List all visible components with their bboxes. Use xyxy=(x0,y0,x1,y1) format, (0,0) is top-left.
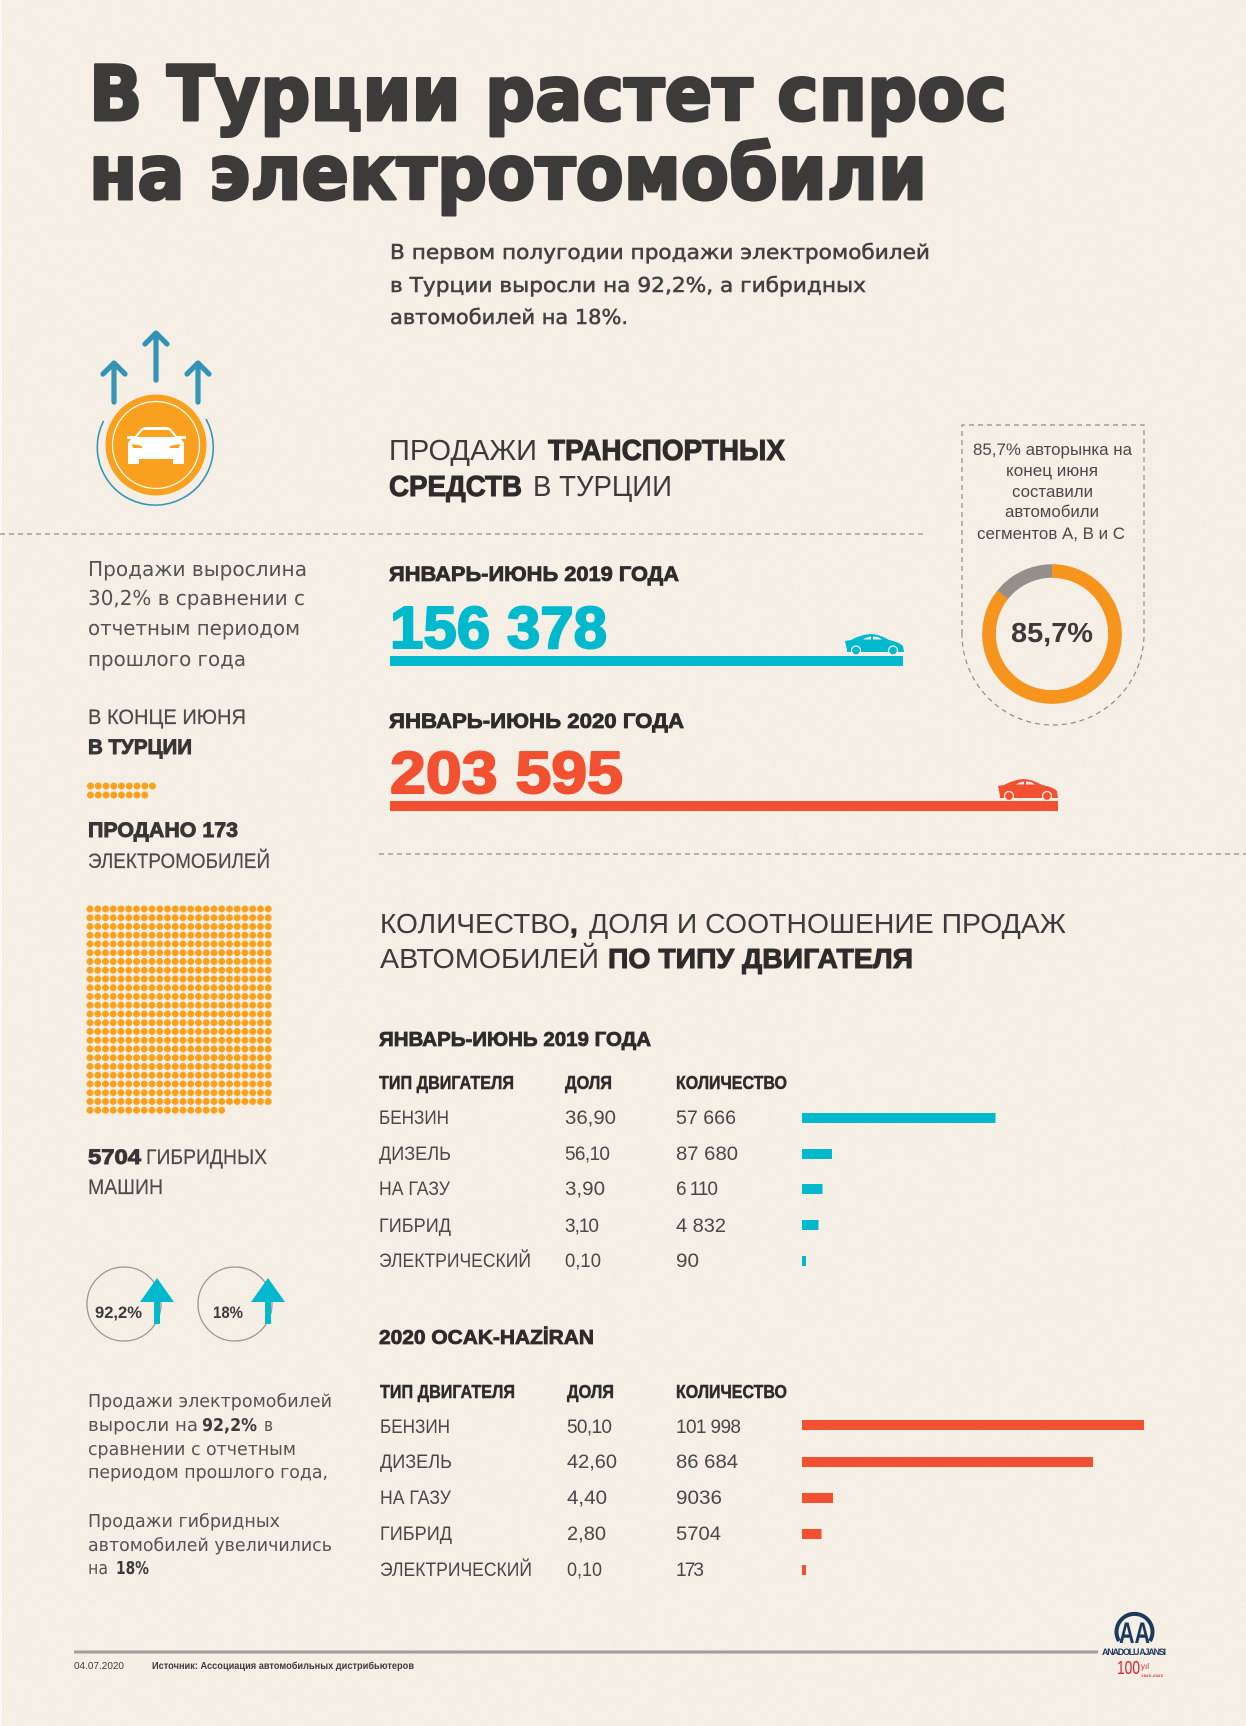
footer xyxy=(74,1650,1098,1672)
text: growth explanation: сравнении с отчетным xyxy=(88,1439,296,1460)
heading: vehicle sales: ПРОДАЖИ xyxy=(389,435,537,467)
text: sales growth: Продажи вырослина xyxy=(88,557,307,581)
text: growth explanation: Продажи гибридных xyxy=(88,1511,280,1532)
text: sales growth: прошлого года xyxy=(88,647,246,671)
footer: 04.07.2020 xyxy=(74,1661,124,1672)
callout text xyxy=(973,440,1133,543)
table header: ТИП ДВИГАТЕЛЯ xyxy=(380,1382,515,1402)
text: growth explanation: Продажи электромобилей xyxy=(88,1391,332,1412)
table rows: ДИЗЕЛЬ xyxy=(380,1452,452,1473)
table rows: 2,80 xyxy=(567,1524,606,1545)
text: growth explanation: на xyxy=(88,1558,108,1579)
title: на электротомобили xyxy=(89,128,927,217)
logo: Anadolu Ajansi: 1920-2020 xyxy=(1141,1673,1164,1678)
table rows: ДИЗЕЛЬ xyxy=(379,1144,451,1165)
icon: 18% growth xyxy=(198,1267,285,1341)
heading: by engine type: АВТОМОБИЛЕЙ xyxy=(380,943,599,974)
heading: by engine type: КОЛИЧЕСТВО xyxy=(380,908,570,939)
table rows: 4,40 xyxy=(567,1488,607,1509)
text: 173 electric cars sold: ПРОДАНО 173 xyxy=(88,819,238,842)
table rows: НА ГАЗУ xyxy=(379,1179,451,1200)
logo: Anadolu Ajansi xyxy=(1102,1614,1166,1678)
table rows xyxy=(380,1417,741,1581)
text: sales growth: отчетным периодом xyxy=(88,616,300,640)
text: at end of June in Turkey: В ТУРЦИИ xyxy=(88,736,192,759)
panel: table 2020: 2020 OCAK-HAZİRAN xyxy=(379,1326,594,1349)
panel: market share callout xyxy=(962,425,1144,725)
heading: by engine type: , xyxy=(570,908,578,939)
table rows: 6 110 xyxy=(676,1179,718,1200)
text: 173 electric cars sold: ЭЛЕКТРОМОБИЛЕЙ xyxy=(88,849,270,873)
table rows: 86 684 xyxy=(676,1452,738,1473)
icon: 92,2% growth xyxy=(87,1267,174,1341)
table rows: 3,10 xyxy=(565,1216,599,1237)
panel: table 2019 xyxy=(379,1029,996,1272)
table header: ТИП ДВИГАТЕЛЯ xyxy=(379,1073,514,1093)
logo: Anadolu Ajansi: 100 xyxy=(1117,1658,1140,1678)
text: 5704 hybrid cars: ГИБРИДНЫХ xyxy=(146,1146,267,1169)
table header: КОЛИЧЕСТВО xyxy=(676,1382,787,1402)
icon: 18% growth: 18% xyxy=(213,1303,243,1322)
table rows: ЭЛЕКТРИЧЕСКИЙ xyxy=(379,1250,531,1272)
table rows: БЕНЗИН xyxy=(379,1108,449,1129)
table rows xyxy=(379,1108,738,1272)
table rows: 173 xyxy=(676,1560,704,1581)
panel: sales 2019 xyxy=(389,563,904,666)
table rows: 0,10 xyxy=(567,1560,602,1581)
table rows: 90 xyxy=(676,1251,699,1272)
table rows: БЕНЗИН xyxy=(380,1417,450,1438)
text: growth explanation: 18% xyxy=(116,1558,149,1579)
icon: car with rising arrows xyxy=(97,333,213,505)
table rows: 50,10 xyxy=(567,1417,612,1438)
dot chart: 5704 hybrid cars xyxy=(86,905,272,1115)
donut chart 85,7%: 85,7% xyxy=(1011,617,1093,648)
heading: by engine type: ДОЛЯ И СООТНОШЕНИЕ ПРОДАЖ xyxy=(589,908,1066,939)
panel: table 2020 xyxy=(379,1326,1144,1581)
intro text: в Турции выросли на 92,2%, а гибридных xyxy=(390,273,866,297)
title: В Турции растет спрос xyxy=(89,49,1007,138)
callout text: конец июня xyxy=(1006,461,1098,480)
text: growth explanation: автомобилей увеличились xyxy=(88,1535,332,1556)
text: growth explanation xyxy=(88,1391,332,1579)
text: 5704 hybrid cars: 5704 xyxy=(88,1146,141,1169)
callout text: сегментов А, В и С xyxy=(977,524,1125,543)
table header: КОЛИЧЕСТВО xyxy=(676,1073,787,1093)
intro text xyxy=(390,240,930,329)
panel: sales 2020: 203 595 xyxy=(390,740,623,806)
panel: sales 2019: 156 378 xyxy=(390,595,607,661)
logo: Anadolu Ajansi: ANADOLU AJANSI xyxy=(1102,1647,1166,1657)
text: growth explanation: периодом прошлого года, xyxy=(88,1462,328,1483)
text: growth explanation: в xyxy=(264,1415,273,1436)
text: sales growth xyxy=(88,557,307,671)
intro text: В первом полугодии продажи электромобилей xyxy=(390,240,930,264)
icon: 92,2% growth: 92,2% xyxy=(95,1303,142,1322)
panel: sales 2019: ЯНВАРЬ-ИЮНЬ 2019 ГОДА xyxy=(389,563,679,586)
table rows: 56,10 xyxy=(565,1144,610,1165)
callout text: составили xyxy=(1012,482,1093,501)
intro text: автомобилей на 18%. xyxy=(390,305,628,329)
donut chart 85,7% xyxy=(989,571,1115,697)
heading: vehicle sales: В ТУРЦИИ xyxy=(533,471,672,503)
text: growth explanation: 92,2% xyxy=(202,1415,257,1436)
logo: Anadolu Ajansi: yıl xyxy=(1141,1662,1149,1671)
table header xyxy=(379,1073,787,1093)
panel: sales 2020 xyxy=(389,710,1058,811)
bar chart 2019 xyxy=(802,1113,996,1266)
heading: vehicle sales: ТРАНСПОРТНЫХ xyxy=(548,435,786,467)
heading: by engine type: ПО ТИПУ ДВИГАТЕЛЯ xyxy=(608,943,913,974)
footer: Источник: Ассоциация автомобильных дистрибьютеров xyxy=(152,1660,414,1672)
icon: red car xyxy=(998,779,1058,800)
table rows: ЭЛЕКТРИЧЕСКИЙ xyxy=(380,1559,532,1581)
table rows: 9036 xyxy=(676,1488,722,1509)
panel: sales 2020: ЯНВАРЬ-ИЮНЬ 2020 ГОДА xyxy=(389,710,684,733)
text: at end of June in Turkey: В КОНЦЕ ИЮНЯ xyxy=(88,706,246,729)
table rows: ГИБРИД xyxy=(380,1524,452,1545)
table rows: 36,90 xyxy=(565,1108,616,1129)
icon: teal car xyxy=(845,634,904,655)
text: growth explanation: выросли на xyxy=(88,1415,198,1436)
table rows: 87 680 xyxy=(676,1144,738,1165)
text: 5704 hybrid cars xyxy=(88,1146,267,1199)
text: 5704 hybrid cars: МАШИН xyxy=(88,1176,163,1199)
heading: vehicle sales: СРЕДСТВ xyxy=(389,471,522,503)
bar chart 2020 xyxy=(802,1420,1144,1575)
panel: table 2019: ЯНВАРЬ-ИЮНЬ 2019 ГОДА xyxy=(379,1029,651,1051)
dot chart: 173 electric cars xyxy=(87,782,156,798)
callout text: автомобили xyxy=(1005,502,1099,521)
table rows: 4 832 xyxy=(676,1216,726,1237)
table header: ДОЛЯ xyxy=(567,1382,614,1402)
table rows: ГИБРИД xyxy=(379,1216,451,1237)
table rows: 3,90 xyxy=(565,1179,605,1200)
table rows: 5704 xyxy=(676,1524,721,1545)
table header: ДОЛЯ xyxy=(565,1073,612,1093)
heading: by engine type xyxy=(380,908,1066,974)
table header xyxy=(380,1382,787,1402)
title xyxy=(89,49,1007,217)
table rows: 101 998 xyxy=(676,1417,741,1438)
table rows: НА ГАЗУ xyxy=(380,1488,452,1509)
text: 173 electric cars sold xyxy=(88,819,270,873)
text: at end of June in Turkey xyxy=(88,706,246,759)
table rows: 57 666 xyxy=(676,1108,736,1129)
logo: Anadolu Ajansi: AA xyxy=(1119,1617,1150,1650)
table rows: 42,60 xyxy=(567,1452,617,1473)
callout text: 85,7% авторынка на xyxy=(973,440,1133,459)
heading: vehicle sales xyxy=(389,435,786,503)
table rows: 0,10 xyxy=(565,1251,601,1272)
text: sales growth: 30,2% в сравнении с xyxy=(88,586,305,610)
